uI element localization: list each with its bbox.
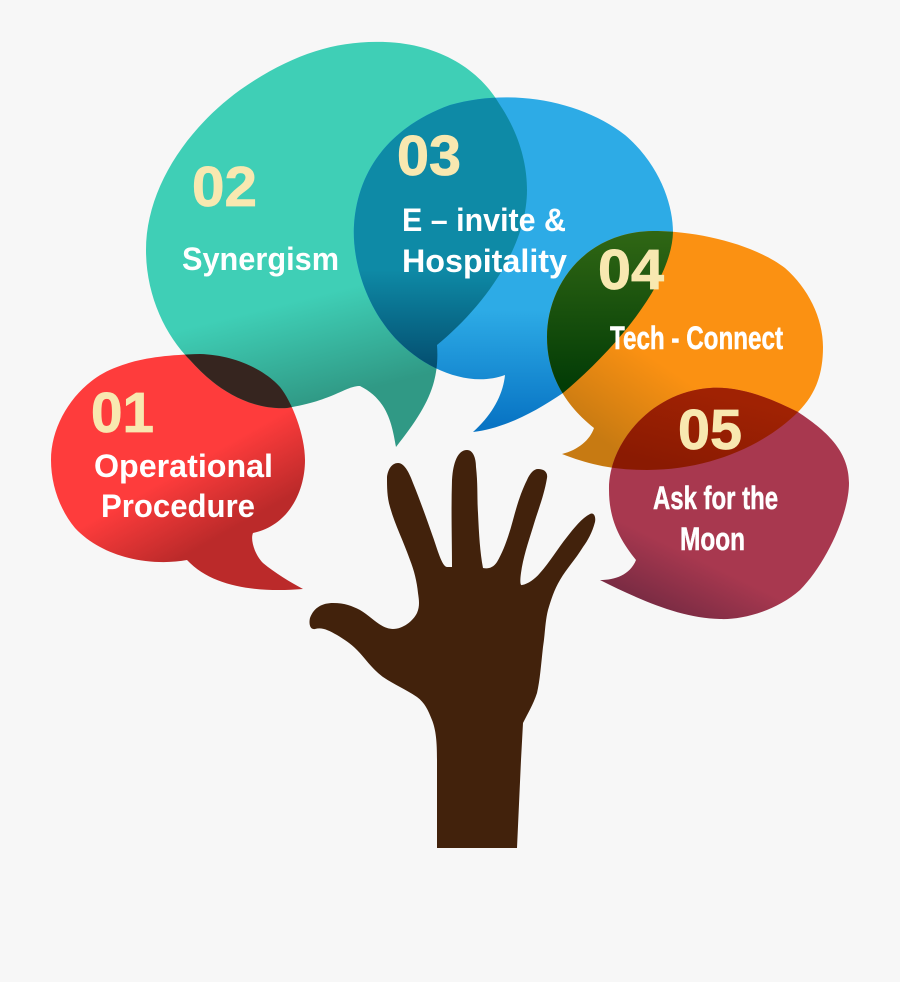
number 04: 04 [598, 238, 664, 302]
label Operational Procedure: Operational [94, 448, 273, 484]
overlap red and teal [184, 354, 292, 408]
callout 01 text [91, 381, 273, 524]
bubble 04 orange [547, 231, 823, 470]
label Ask for the Moon: Ask for the [653, 480, 778, 516]
label Operational Procedure: Procedure [101, 488, 255, 524]
label Ask for the Moon: Moon [680, 521, 745, 557]
infographic: hand tree with speech bubbles [51, 42, 849, 848]
number 03: 03 [397, 124, 461, 188]
callout 03 text [397, 124, 567, 279]
label Operational Procedure [94, 448, 273, 524]
label Tech - Connect: Tech - Connect [610, 320, 783, 356]
number 02: 02 [192, 155, 257, 219]
number 05: 05 [678, 398, 742, 462]
bubble 03 blue [354, 97, 673, 432]
label E-invite and Hospitality: E – invite & [402, 202, 566, 238]
number 01: 01 [91, 381, 154, 445]
bubble 01 red [51, 354, 305, 590]
label Ask for the Moon [653, 480, 778, 557]
overlap teal and blue [354, 98, 527, 368]
bubble 02 teal [146, 42, 527, 447]
label E-invite and Hospitality [402, 202, 567, 279]
callout 05 text [653, 398, 778, 557]
bubble 05 maroon [600, 388, 849, 619]
label Synergism: Synergism [182, 241, 339, 277]
overlap orange and maroon [612, 388, 798, 470]
overlap blue and orange [547, 231, 673, 394]
callout 02 text [182, 155, 339, 277]
label E-invite and Hospitality: Hospitality [402, 243, 567, 279]
callout 04 text [598, 238, 783, 356]
icon: hand [310, 450, 595, 848]
